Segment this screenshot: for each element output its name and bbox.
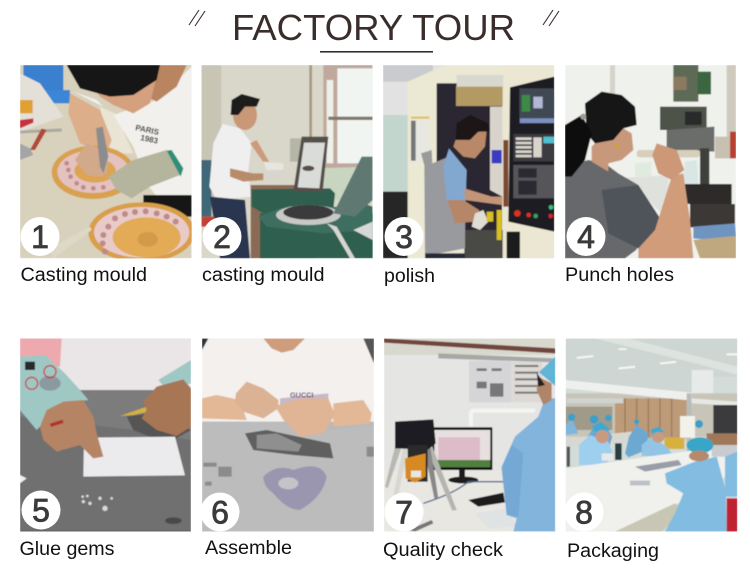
number badge 4 bbox=[566, 217, 606, 256]
number badge 2 bbox=[202, 217, 242, 256]
photo 7: inspection instrument and monitor bbox=[384, 338, 555, 532]
photo 6: assembling gems bbox=[202, 338, 374, 532]
photo 5: hands with tweezers on felt bbox=[20, 338, 191, 532]
step 8: packaging bbox=[564, 338, 737, 562]
number badge 3 bbox=[384, 217, 424, 256]
caption 1: Casting mould bbox=[20, 264, 147, 286]
caption 3: polish bbox=[384, 265, 435, 287]
header: factory tour title bbox=[189, 7, 559, 53]
number badge 8: 8 bbox=[575, 494, 593, 530]
step 6: assemble bbox=[200, 338, 374, 559]
step 2: casting mould bbox=[201, 65, 373, 286]
step 1: casting mould bbox=[20, 65, 195, 286]
number badge 7: 7 bbox=[395, 494, 413, 530]
number badge 1: 1 bbox=[31, 219, 49, 255]
number badge 6: 6 bbox=[211, 494, 229, 530]
caption 6: Assemble bbox=[205, 537, 292, 559]
number badge 3: 3 bbox=[395, 219, 413, 255]
caption 5: Glue gems bbox=[20, 538, 115, 560]
photo 6: assembling gems: GUCCI bbox=[290, 390, 314, 399]
step 4: punch holes bbox=[565, 65, 736, 286]
number badge 8 bbox=[564, 492, 604, 532]
number badge 7 bbox=[384, 492, 424, 532]
step 3: polish bbox=[383, 65, 554, 287]
step 5: glue gems bbox=[20, 338, 191, 560]
caption 4: Punch holes bbox=[565, 264, 674, 286]
number badge 1 bbox=[20, 217, 60, 256]
photo 4: woman at punch press bbox=[565, 65, 736, 258]
number badge 6 bbox=[200, 492, 240, 532]
photo 1: worker at mould: 1983 bbox=[140, 133, 159, 146]
caption 7: Quality check bbox=[383, 539, 503, 561]
number badge 5 bbox=[22, 490, 60, 530]
number badge 2: 2 bbox=[213, 219, 231, 255]
caption 2: casting mould bbox=[202, 264, 324, 286]
title underline bbox=[320, 51, 433, 53]
photo 1: worker at mould bbox=[20, 65, 195, 262]
photo 3: worker at CNC machine bbox=[383, 65, 554, 258]
photo 1: worker at mould: PARIS bbox=[135, 123, 160, 137]
title: FACTORY TOUR bbox=[232, 7, 515, 48]
decorative slashes right bbox=[543, 10, 559, 26]
caption 8: Packaging bbox=[567, 540, 659, 562]
step 7: quality check bbox=[383, 338, 555, 561]
number badge 5: 5 bbox=[32, 492, 50, 528]
number badge 4: 4 bbox=[577, 219, 595, 255]
photo 8: packaging workshop bbox=[566, 338, 737, 532]
decorative slashes left bbox=[189, 10, 205, 26]
photo 2: worker at casting machine bbox=[201, 65, 373, 258]
